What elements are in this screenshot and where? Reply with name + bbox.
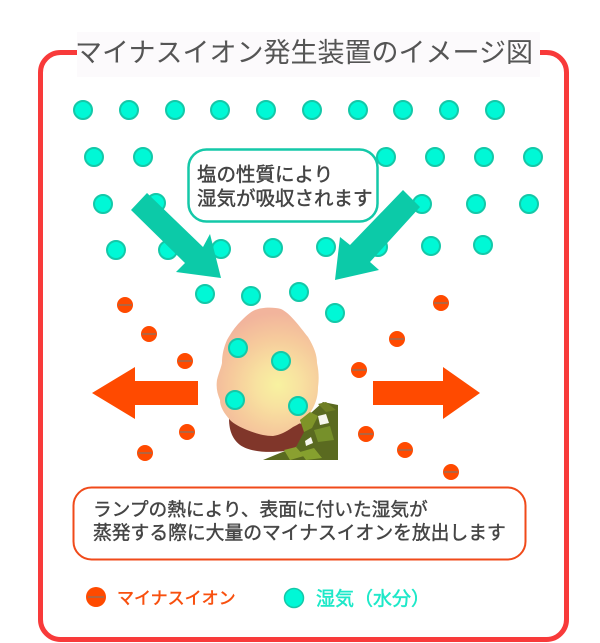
lamp base — [229, 418, 308, 452]
title: マイナスイオン発生装置のイメージ図 — [75, 38, 533, 68]
callout: evaporation releases ions — [74, 488, 526, 560]
legend: moisture: 湿気（水分） — [316, 588, 430, 610]
legend: negative ion: マイナスイオン — [117, 589, 236, 608]
salt lamp — [217, 308, 338, 460]
callout: evaporation releases ions: ランプの熱により、表面に付いた湿気が — [93, 499, 428, 520]
arrow: red left — [92, 367, 198, 419]
moisture particles near the lamp — [196, 283, 344, 415]
callout: salt absorbs moisture: 塩の性質により — [197, 164, 333, 186]
negative ions — [117, 295, 459, 480]
callout: evaporation releases ions: 蒸発する際に大量のマイナスイオンを放出します — [93, 522, 506, 543]
moisture particles — [74, 101, 542, 259]
title — [75, 32, 540, 77]
arrow: teal right — [335, 190, 420, 280]
arrow: red right — [373, 367, 480, 419]
lamp body — [217, 308, 319, 436]
lamp leaves — [263, 402, 338, 460]
callout: salt absorbs moisture: 湿気が吸収されます — [197, 188, 373, 210]
callout: salt absorbs moisture — [188, 150, 378, 222]
arrow: teal left — [131, 193, 221, 278]
